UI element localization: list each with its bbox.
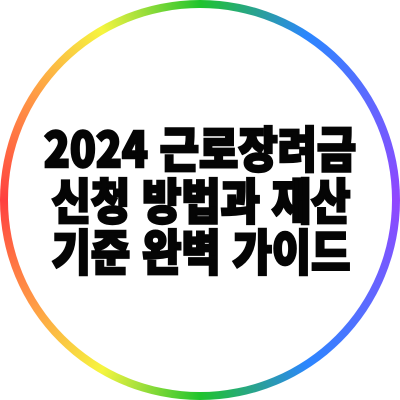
title line 3: 기준 완벽 가이드 bbox=[52, 214, 350, 284]
title line 1: 2024 근로장려금 bbox=[44, 111, 356, 181]
title line 2: 신청 방법과 재산 bbox=[52, 163, 350, 233]
